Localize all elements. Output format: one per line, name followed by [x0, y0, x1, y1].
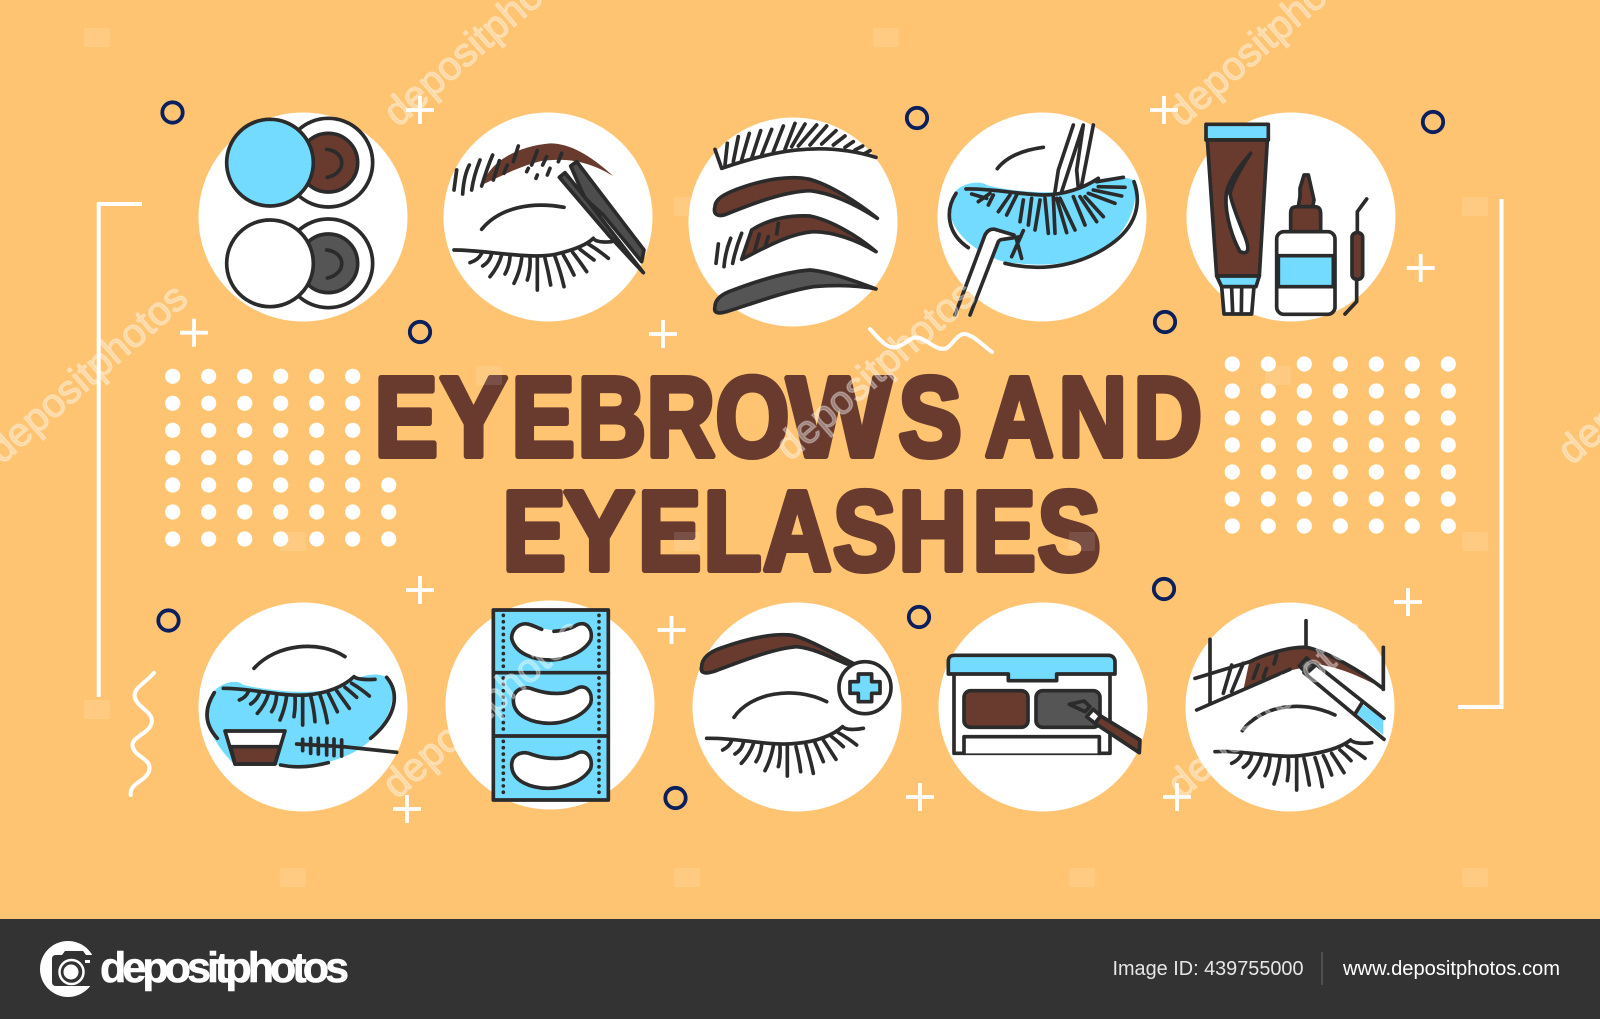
watermark text: depositphotos: [767, 272, 984, 469]
icon: eyebrow tweezing: [454, 143, 644, 290]
title: ELASHES: [638, 469, 1101, 595]
footer logo icon: [40, 941, 96, 997]
icon: tint tube, bottle and tool: [1206, 124, 1367, 314]
icon: contact lens compacts: [227, 118, 373, 308]
top squiggle: [870, 329, 992, 352]
title: EBRO: [511, 355, 789, 481]
title: W: [787, 355, 892, 481]
title: E: [502, 469, 566, 595]
title: E: [374, 355, 438, 481]
left bracket: [99, 204, 142, 697]
watermark text: [0, 0, 1600, 807]
watermark camera marks: [84, 28, 1488, 887]
website url: www.depositphotos.com: [1342, 958, 1560, 980]
watermark text: depositphotos: [1159, 610, 1376, 807]
icon: lash tint with mascara wand: [207, 646, 397, 767]
icon: brow powder palette with brush: [948, 655, 1140, 753]
white plus signs: [180, 96, 1435, 823]
watermark text: depositphotos: [374, 610, 591, 807]
title: S AND: [898, 355, 1202, 481]
title: Y: [564, 469, 635, 595]
icon: eyebrow shapes: [714, 123, 877, 313]
left squiggle: [131, 673, 154, 795]
navy rings: [158, 102, 1443, 808]
icon: under-eye patches sheet: [493, 610, 608, 800]
image id: Image ID: 439755000: [1112, 958, 1304, 980]
icon: eyelash extension with tweezers: [949, 125, 1137, 315]
footer bar: [0, 919, 1600, 1019]
footer brand name: depositphotos: [100, 944, 349, 992]
title: [374, 355, 1202, 595]
white circles behind the icons: [198, 112, 1396, 812]
title: Y: [440, 355, 507, 481]
right dot grid: [1225, 356, 1456, 534]
icon: brow mapping with pencil: [1195, 621, 1384, 790]
left dot grid: [165, 369, 396, 547]
icon: eyebrow care with medical plus: [701, 635, 891, 776]
right bracket: [1458, 199, 1502, 707]
